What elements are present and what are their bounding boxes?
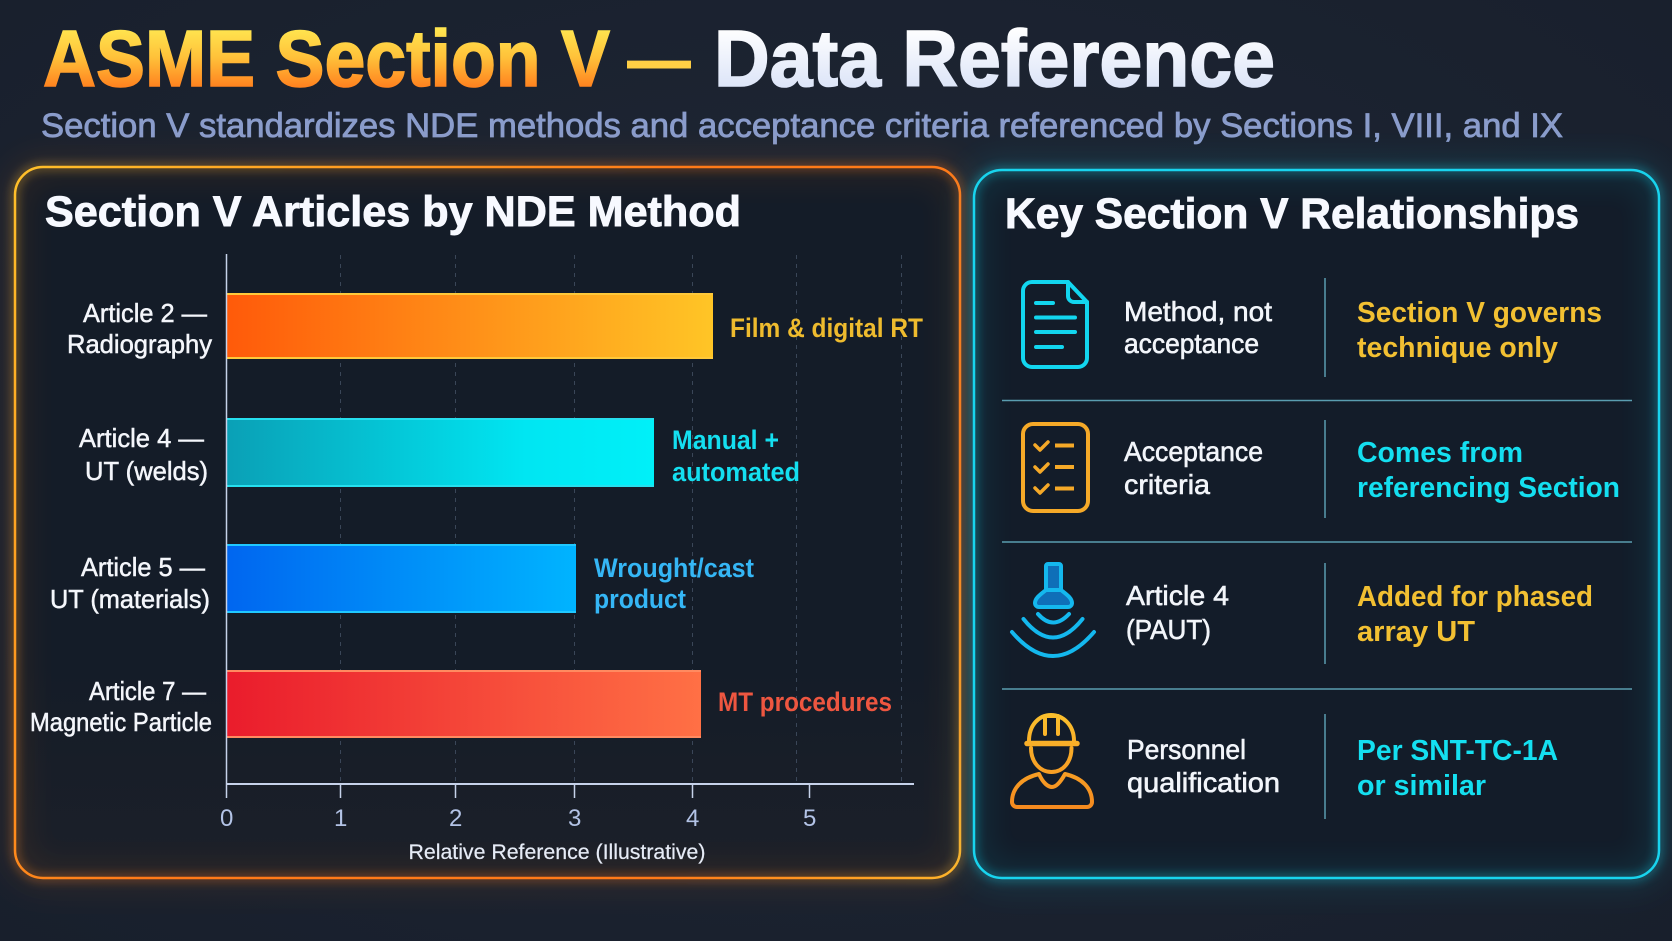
heading: relationships: Key Section V Relationships [1005,190,1579,238]
row label [1126,580,1229,645]
row label: (PAUT) [1126,614,1211,645]
row: article 4 [1012,564,1593,656]
value label: wrought: product [594,584,686,614]
bar chart [30,254,923,864]
bar: article 2 [227,293,713,359]
row label: Article 4 [1126,580,1229,611]
bar: article 5 [227,544,576,613]
axes [226,254,914,798]
row note [1357,297,1602,364]
axis tick labels [220,805,816,832]
category label: article 4: Article 4 — [79,423,204,453]
axis tick labels: 5 [803,805,816,832]
row label: Acceptance [1124,436,1263,467]
axis tick labels: 1 [334,805,347,832]
category label: article 2: Article 2 — [83,298,207,328]
value label: MT: MT procedures [718,687,892,717]
row note: array UT [1357,616,1475,648]
icon: worker [1012,715,1092,807]
row label [1124,296,1272,359]
title: Data Reference [714,14,1275,103]
row label: qualification [1127,767,1280,798]
title [43,14,1275,103]
value label: manual: Manual + [672,425,779,455]
row note: or similar [1357,770,1486,802]
panel: section V articles chart [15,167,960,878]
category label: article 2 [67,298,212,359]
category label: article 4: UT (welds) [85,456,208,486]
row note: technique only [1357,332,1558,364]
category label: article 2: Radiography [67,329,212,359]
category label: article 5: Article 5 — [81,552,205,582]
value label: manual: automated [672,457,800,487]
category label: article 7: Article 7 — [89,676,206,706]
category label: article 4 [79,423,208,486]
row label: criteria [1124,469,1210,500]
row note [1357,735,1558,802]
category label: article 5: UT (materials) [50,584,210,614]
bar: article 4 [227,418,654,487]
bar: article 7 [227,670,701,738]
row note [1357,437,1620,504]
axis title: Relative Reference (Illustrative) [408,841,706,864]
row note: Comes from [1357,437,1523,469]
value label: manual [672,425,800,487]
panel: key relationships [974,170,1659,878]
title: — [627,14,691,103]
value label: film: Film & digital RT [730,313,923,343]
axis tick labels: 2 [449,805,462,832]
row note: Section V governs [1357,297,1602,329]
row label [1124,436,1263,500]
row label: Personnel [1127,734,1246,765]
icon: ultrasonic probe [1012,564,1094,656]
value label: wrought [594,553,754,614]
row note: Added for phased [1357,581,1593,613]
subtitle: Section V standardizes NDE methods and acceptance criteria referenced by Sections I, VIII, and IX [41,107,1563,145]
category label: article 5 [50,552,210,614]
axis tick labels: 0 [220,805,233,832]
row: personnel [1012,715,1558,807]
row label [1127,734,1280,798]
row note [1357,581,1593,648]
row note: Per SNT-TC-1A [1357,735,1558,767]
row label: acceptance [1124,328,1259,359]
row: acceptance [1023,424,1620,511]
category label: article 7 [30,676,212,737]
heading: chart: Section V Articles by NDE Method [45,188,741,236]
icon: checklist [1023,424,1088,511]
icon: document [1023,282,1087,367]
title: ASME Section V [43,14,610,103]
row: method [1023,282,1602,367]
row note: referencing Section [1357,472,1620,504]
row label: Method, not [1124,296,1272,327]
axis tick labels: 4 [686,805,699,832]
value label: wrought: Wrought/cast [594,553,754,583]
category label: article 7: Magnetic Particle [30,707,212,737]
axis tick labels: 3 [568,805,581,832]
